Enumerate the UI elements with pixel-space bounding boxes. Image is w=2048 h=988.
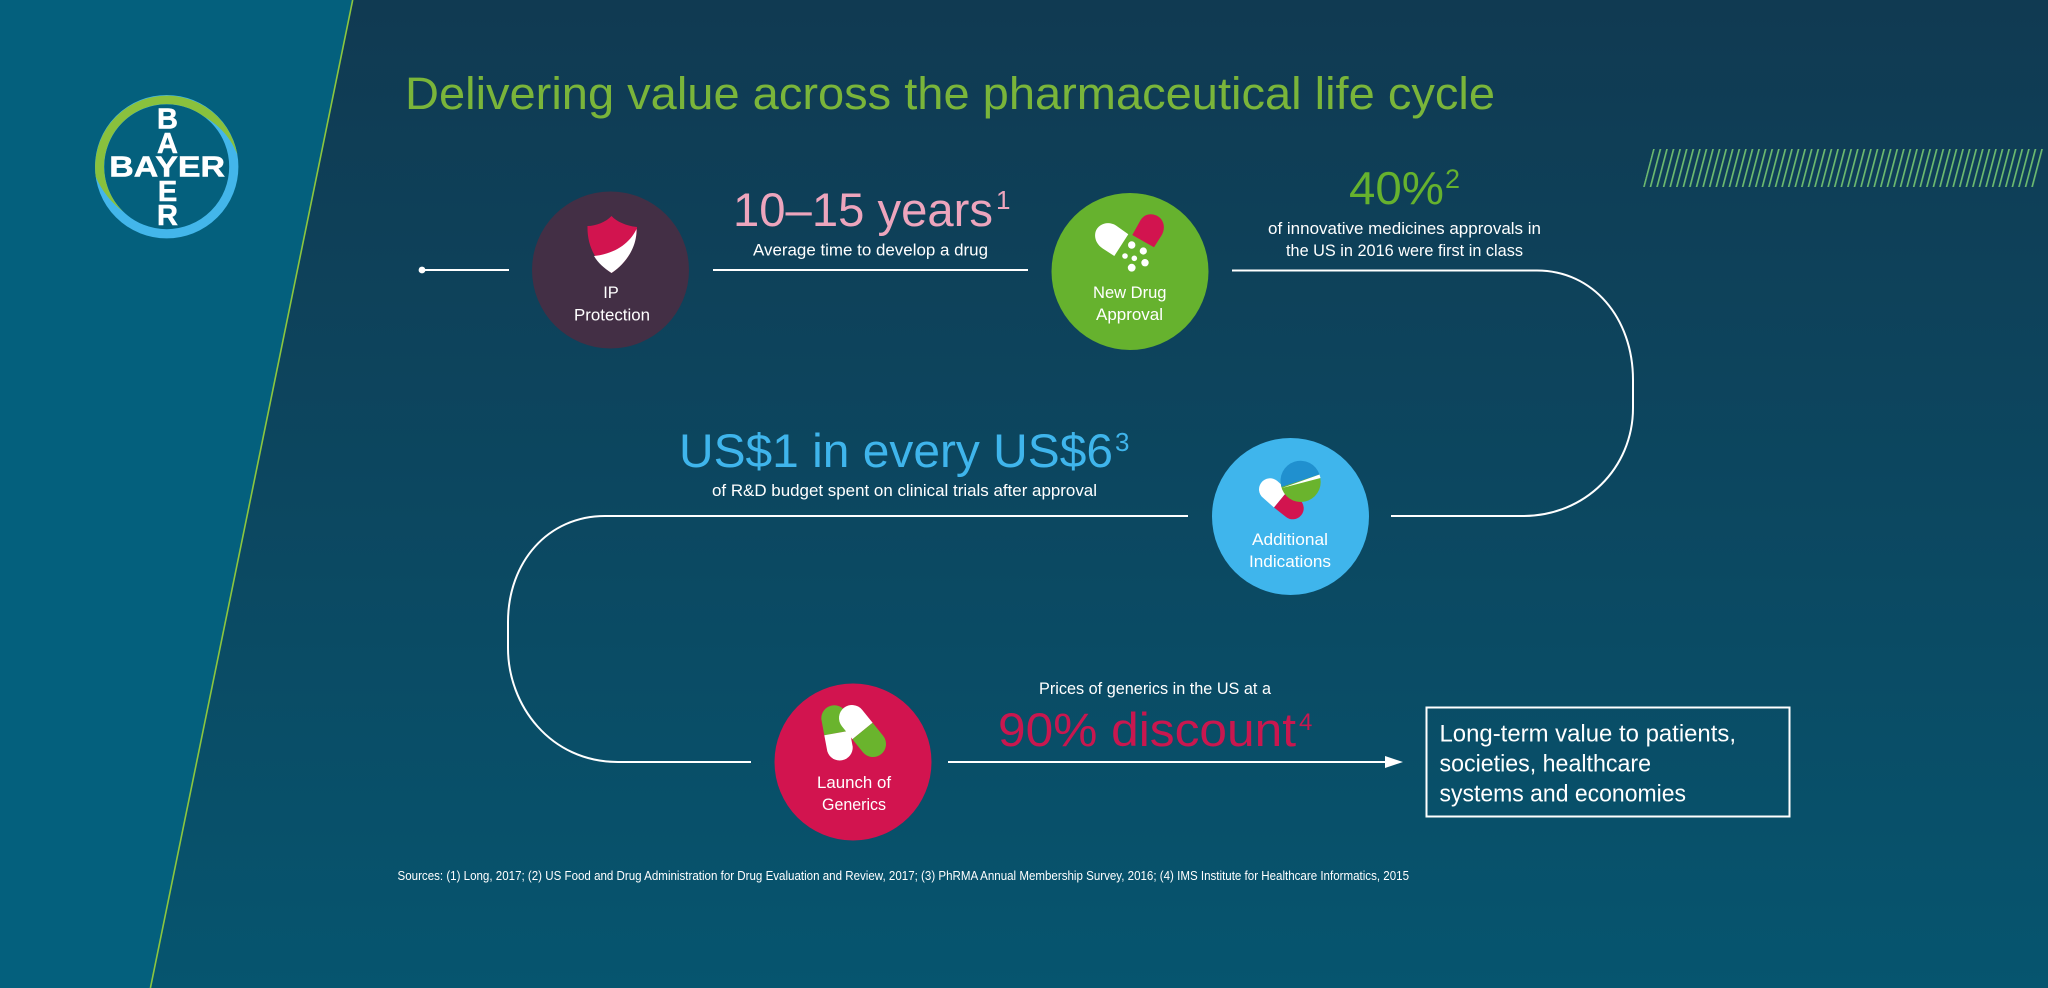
Bayer logo: R: [157, 200, 178, 232]
stat: 40 percent: [1268, 162, 1541, 260]
stat: 40 percent: of innovative medicines approvals in: [1268, 220, 1541, 238]
stat: 90 percent discount: Prices of generics in the US at a: [1039, 680, 1272, 698]
stat: 10-15 years: 10–15 years: [733, 183, 993, 236]
circle: new drug approval: [1052, 193, 1208, 350]
circle: IP protection: Protection: [574, 306, 650, 324]
Bayer logo: BAYER: [109, 152, 225, 184]
circle: additional indications: Indications: [1249, 553, 1331, 571]
line: additional indications to generics: [508, 516, 1188, 762]
icon: open capsule: [1095, 214, 1164, 272]
sources: Sources: (1) Long, 2017; (2) US Food and Drug Administration for Drug Evaluation and Review, 2017; (3) PhRMA Annual Membership Survey, 2016; (4) IMS Institute for Healthcare Informatics, 2015: [398, 869, 1409, 883]
stat: 10-15 years: [733, 183, 1010, 260]
circle: new drug approval: New Drug: [1093, 284, 1166, 302]
circle: launch of generics: [774, 684, 932, 840]
Bayer logo: B: [157, 103, 178, 135]
circle: launch of generics: Launch of: [817, 774, 891, 792]
stat: US$1 in every US$6: US$1 in every US$6: [679, 424, 1113, 477]
circle: IP protection: IP: [603, 284, 619, 302]
title: Delivering value across the pharmaceutical life cycle: [405, 68, 1495, 119]
Bayer logo: A: [157, 128, 178, 160]
circle: additional indications: [1212, 438, 1369, 595]
circle: new drug approval: Approval: [1096, 306, 1163, 324]
icon: shield: [587, 216, 637, 273]
stat: 40 percent: 40%: [1349, 162, 1444, 214]
callout: long-term value: systems and economies: [1440, 780, 1686, 808]
callout: long-term value: Long-term value to patients,: [1440, 720, 1736, 748]
line: approval to additional indications: [1232, 270, 1633, 516]
stat: 40 percent: the US in 2016 were first in class: [1286, 242, 1523, 260]
stat: 90 percent discount: [998, 680, 1312, 756]
icon: capsule and tablet: [1259, 461, 1321, 519]
stat: 40 percent: 2: [1445, 164, 1460, 194]
stat: US$1 in every US$6: 3: [1115, 427, 1129, 457]
stat: 10-15 years: 1: [996, 185, 1010, 215]
stat: 90 percent discount: 90% discount: [998, 703, 1296, 756]
callout: long-term value: societies, healthcare: [1440, 750, 1651, 778]
circle: launch of generics: Generics: [822, 796, 886, 814]
stat: US$1 in every US$6: [679, 424, 1129, 500]
stat: 90 percent discount: 4: [1299, 709, 1312, 736]
left diagonal panel: [0, 0, 353, 988]
Bayer logo: [95, 96, 237, 234]
callout: long-term value: [1426, 708, 1790, 816]
arrow to long-term value: [948, 756, 1403, 768]
circle: additional indications: Additional: [1252, 531, 1328, 549]
timeline start line: [419, 267, 509, 273]
stat: 10-15 years: Average time to develop a drug: [753, 242, 988, 260]
line: IP protection to new drug approval: [713, 269, 1028, 271]
stat: US$1 in every US$6: of R&D budget spent on clinical trials after approval: [712, 482, 1097, 500]
circle: IP protection: [532, 192, 689, 348]
Bayer logo: E: [158, 176, 177, 208]
decorative stripes: [1643, 149, 2047, 187]
icon: two capsules: [821, 705, 886, 760]
